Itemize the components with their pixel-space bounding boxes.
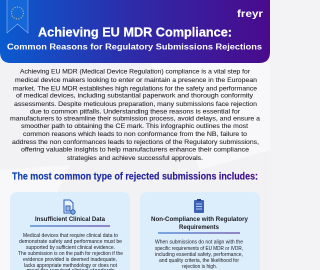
card body text: The submission is on the path for rejection if the [18, 251, 123, 257]
card title: Requirements [179, 224, 220, 231]
card body text: demonstrate safety and performance must be [19, 239, 122, 245]
intro paragraph: common reasons which leads to non conformance from the NB, failure to [23, 132, 248, 138]
card title [151, 216, 249, 231]
intro paragraph: medical device makers looking to enter or maintain a presence in the European [15, 78, 257, 84]
card body text [155, 240, 243, 270]
card body text: lacks appropriate methodology or does not [24, 263, 118, 269]
subtitle: Common Reasons for Regulatory Submissions Rejections [7, 42, 263, 52]
card body text [18, 233, 123, 270]
card body text: including essential safety, performance, [155, 252, 243, 258]
intro paragraph: market. The EU MDR establishes high regulations for the safety and performance [13, 86, 258, 92]
divider [158, 232, 240, 234]
card body text: Medical devices that require clinical data to [23, 233, 118, 239]
panel: insufficient clinical data [10, 192, 130, 270]
title: Achieving EU MDR Compliance: [38, 26, 232, 40]
header banner [0, 0, 270, 63]
icon: EU ribbon [7, 0, 28, 33]
card title: Insufficient Clinical Data [35, 216, 106, 223]
intro paragraph: offering valuable insights to help manufacturers enhance their compliance [21, 148, 250, 154]
intro paragraph: address the non conformances leads to rejections of the Regulatory submissions, [12, 140, 259, 146]
icon: clinical document [64, 200, 75, 214]
card body text: specific requirements of EU MDR or IVDR, [155, 246, 243, 252]
card body text: rejection is high. [182, 264, 217, 270]
intro paragraph: smoother path to obtaining the CE mark. This infographic outlines the most [21, 124, 248, 130]
icon: clipboard checklist [194, 199, 204, 213]
intro paragraph [10, 70, 261, 162]
panel: non-compliance with regulatory requirements [140, 192, 260, 270]
card body text: evidence provided is deemed inadequate, [23, 257, 117, 263]
intro paragraph: due to common pitfalls. Understanding these reasons is essential for [30, 110, 240, 116]
card title: Non-Compliance with Regulatory [151, 216, 249, 223]
card body text: supported by sufficient clinical evidence. [26, 245, 115, 251]
card body text: and quality criteria, the likelihood for [159, 258, 239, 264]
intro paragraph: of medical devices, including substantial paperwork and thorough conformity [16, 94, 253, 100]
intro paragraph: manufacturers to streamline their submission process, avoid delays, and ensure a [10, 116, 261, 122]
card body text: When submissions do not align with the [155, 240, 243, 246]
intro paragraph: Achieving EU MDR (Medical Device Regulation) compliance is a vital step for [20, 70, 250, 76]
intro paragraph: assessments. Despite meticulous preparation, many submissions face rejection [14, 102, 257, 108]
logo: freyr: freyr [237, 9, 263, 20]
intro paragraph: strategies and achieve successful approvals. [67, 156, 203, 162]
divider [30, 226, 110, 227]
